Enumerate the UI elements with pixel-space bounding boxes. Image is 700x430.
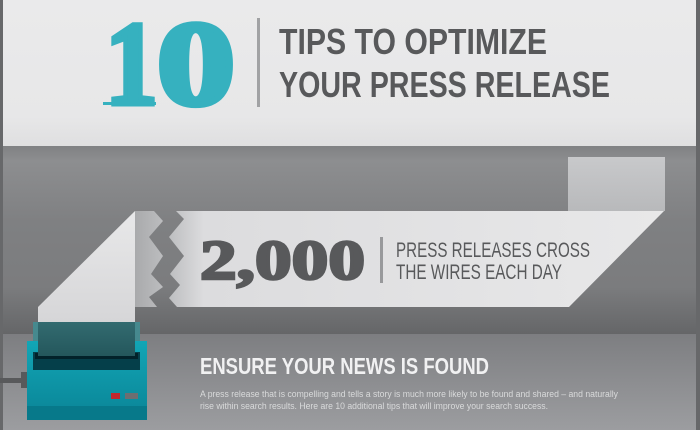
torn paper fold — [135, 211, 163, 307]
paper sheet from printer — [38, 211, 135, 322]
lower grey panel — [3, 334, 696, 430]
header panel — [3, 0, 696, 146]
ribbon main with stat — [169, 211, 664, 307]
printer body — [27, 341, 147, 420]
paper cover edge — [33, 322, 140, 341]
red button — [111, 393, 120, 399]
paper cover — [38, 322, 135, 356]
body paragraph: rise within search results. Here are 10 additional tips that will improve your search success. — [200, 401, 548, 412]
title: TIPS TO OPTIMIZE — [279, 21, 547, 62]
section heading: ENSURE YOUR NEWS IS FOUND — [200, 353, 489, 379]
big number 10: 1 — [105, 0, 158, 130]
ribbon tail — [568, 157, 665, 211]
stat caption: THE WIRES EACH DAY — [396, 261, 562, 284]
plug — [21, 372, 27, 388]
stat number: 2,000 — [200, 230, 365, 292]
big number 10: 0 — [157, 0, 235, 130]
grey indicator — [125, 393, 138, 399]
icon: fax printer — [0, 322, 147, 420]
stat divider — [380, 237, 383, 283]
big number 10 — [103, 0, 235, 130]
header divider — [257, 18, 260, 107]
stat caption: PRESS RELEASES CROSS — [396, 239, 590, 262]
paper slot — [33, 352, 140, 370]
body paragraph: A press release that is compelling and tells a story is much more likely to be found and shared – and naturally — [200, 389, 618, 400]
power cord — [0, 378, 22, 383]
printer base — [27, 406, 147, 420]
title: YOUR PRESS RELEASE — [279, 64, 610, 105]
middle grey panel — [3, 146, 696, 334]
